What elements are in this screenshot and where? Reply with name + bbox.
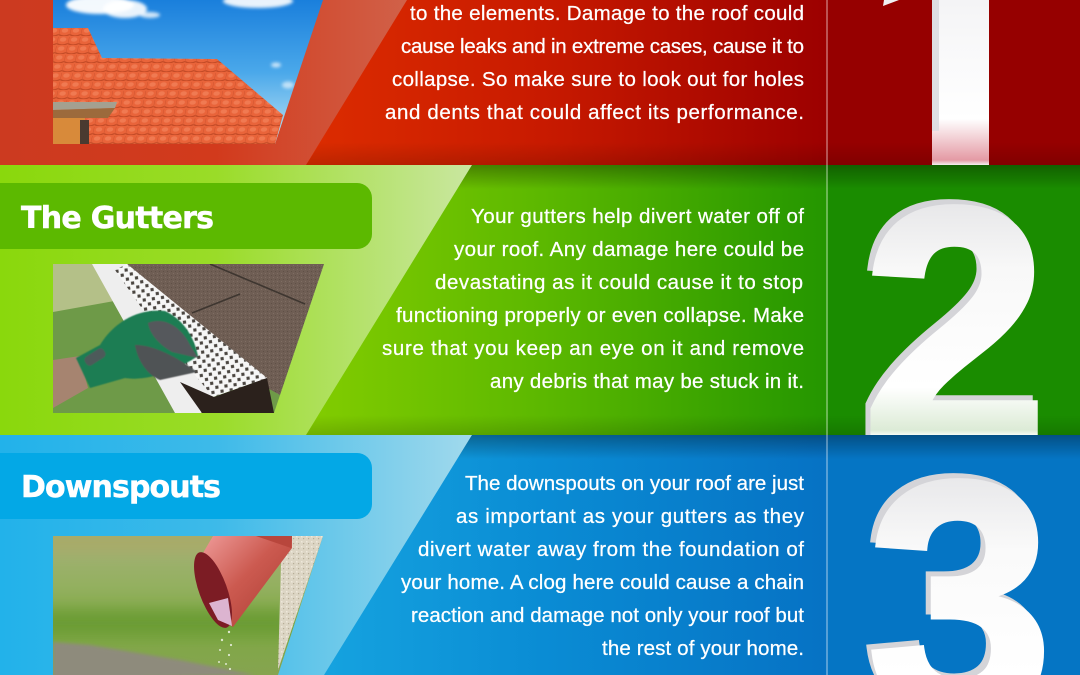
title bar: Downspouts: Downspouts [21, 470, 221, 505]
photo: red tiled roof against sky [53, 0, 325, 144]
body text: the gutters: devastating as it could cause it to stop [435, 271, 803, 294]
body text: downspouts [401, 472, 805, 660]
body text: the roof: cause leaks and in extreme cases, cause it to [401, 35, 804, 58]
title bar: Downspouts [0, 453, 372, 519]
body text: the gutters [382, 205, 804, 393]
body text: the roof: collapse. So make sure to look out for holes [392, 68, 804, 91]
body text: downspouts: your home. A clog here could cause a chain [401, 571, 804, 594]
number column blue [828, 435, 1080, 675]
title bar: The Gutters [0, 183, 372, 249]
number column green [828, 165, 1080, 435]
body text: downspouts: reaction and damage not only your roof but [411, 604, 804, 627]
section 2: the gutters (green) [0, 165, 1080, 435]
body text: the gutters: your roof. Any damage here could be [454, 238, 804, 261]
column divider line [826, 0, 828, 675]
body text: downspouts: as important as your gutters as they [456, 505, 805, 528]
body text: the roof [385, 2, 804, 124]
body text: the roof: and dents that could affect its performance. [385, 101, 804, 124]
section 1: the roof (red) [0, 0, 1080, 165]
photo: gloved hand on gutter guard [53, 264, 325, 414]
number 2 [865, 199, 1038, 435]
body text: the gutters: Your gutters help divert water off of [471, 205, 804, 228]
left green panel [0, 165, 480, 435]
number 2: 2 [857, 133, 1043, 507]
body text: downspouts: The downspouts on your roof are just [465, 472, 804, 495]
dark green text panel [306, 165, 1080, 435]
body text: the gutters: sure that you keep an eye on it and remove [382, 337, 804, 360]
body text: the gutters: any debris that may be stuck in it. [490, 370, 804, 393]
photo: red downspout dripping water [40, 530, 325, 675]
body text: downspouts: the rest of your home. [602, 637, 804, 660]
body text: the roof: to the elements. Damage to the roof could [410, 2, 804, 25]
left blue panel [0, 435, 480, 675]
number 2: 2 [862, 138, 1048, 512]
dark red text panel [306, 0, 1080, 165]
number column red [828, 0, 1080, 165]
left red panel [0, 0, 480, 165]
number 1 [883, 0, 989, 165]
body text: downspouts: divert water away from the foundation of [418, 538, 804, 561]
dark blue text panel [324, 435, 1080, 675]
body text: the gutters: functioning properly or even collapse. Make [396, 304, 804, 327]
title bar: The Gutters: The Gutters [21, 201, 214, 236]
pipe [203, 536, 292, 627]
section 3: downspouts (blue) [0, 435, 1080, 675]
